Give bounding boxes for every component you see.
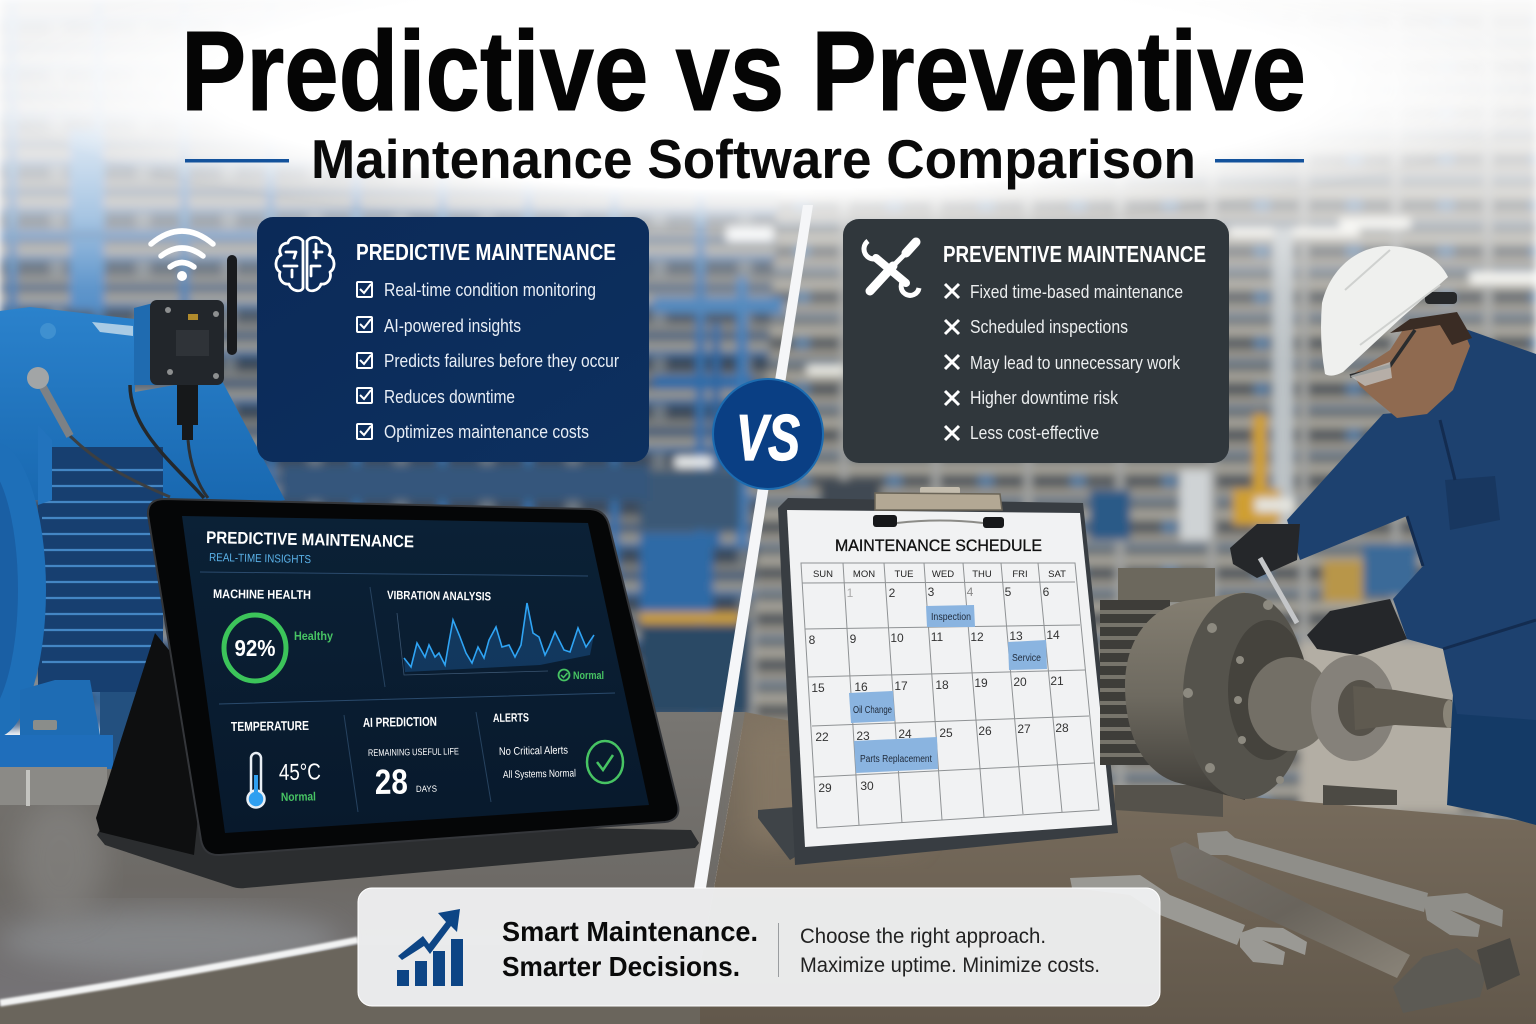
tablet dashboard: REAL-TIME INSIGHTS bbox=[209, 552, 311, 566]
calendar: maintenance schedule: Parts Replacement bbox=[860, 754, 932, 765]
calendar: maintenance schedule: 25 bbox=[939, 726, 953, 740]
calendar: maintenance schedule: 14 bbox=[1046, 628, 1060, 642]
VS badge bbox=[713, 379, 823, 489]
sensor device with antenna and cables bbox=[27, 255, 237, 498]
calendar: maintenance schedule: 30 bbox=[860, 779, 874, 793]
icon: wifi signal bbox=[151, 231, 213, 280]
calendar: maintenance schedule: 27 bbox=[1017, 722, 1031, 736]
calendar: maintenance schedule: 6 bbox=[1043, 585, 1050, 599]
clipboard board bbox=[778, 498, 1118, 865]
calendar: maintenance schedule: 4 bbox=[967, 585, 974, 599]
tablet dashboard: Normal bbox=[573, 670, 604, 682]
callout bar: Smart Maintenance. bbox=[502, 916, 758, 947]
calendar: maintenance schedule: 20 bbox=[1013, 675, 1027, 689]
gloves bbox=[1230, 524, 1300, 578]
vibration chart bbox=[397, 603, 594, 675]
gauge 92% bbox=[224, 615, 286, 681]
panel: predictive maintenance bbox=[257, 217, 649, 462]
tablet dashboard: DAYS bbox=[416, 784, 437, 794]
tablet dashboard: TEMPERATURE bbox=[231, 718, 309, 734]
screen bbox=[182, 516, 649, 833]
calendar: maintenance schedule: 2 bbox=[889, 586, 896, 600]
tablet dashboard: AI PREDICTION bbox=[363, 714, 437, 730]
calendar: maintenance schedule: 23 bbox=[856, 729, 870, 743]
tablet dashboard: 28 bbox=[374, 762, 408, 802]
tablet dashboard: VIBRATION ANALYSIS bbox=[387, 588, 491, 603]
callout bar: Maximize uptime. Minimize costs. bbox=[800, 954, 1100, 977]
small wrench bbox=[1070, 875, 1307, 965]
tablet dashboard: REMAINING USEFUL LIFE bbox=[368, 746, 459, 759]
calendar: maintenance schedule: Oil Change bbox=[853, 705, 892, 716]
checklist bbox=[357, 279, 619, 442]
panel: preventive maintenance bbox=[843, 219, 1229, 463]
gauge 92%: 92% bbox=[234, 635, 276, 661]
calendar: maintenance schedule: 18 bbox=[935, 678, 949, 692]
calendar: maintenance schedule: 29 bbox=[818, 781, 832, 795]
calendar: maintenance schedule: MON bbox=[853, 569, 875, 580]
checklist: Predicts failures before they occur bbox=[384, 350, 619, 371]
calendar: maintenance schedule: 26 bbox=[978, 724, 992, 738]
wrenches and hammer bbox=[1070, 831, 1520, 1013]
calendar: maintenance schedule: Service bbox=[1012, 653, 1041, 664]
paper bbox=[787, 510, 1112, 847]
goggles bbox=[1350, 330, 1415, 386]
calendar: maintenance schedule: 5 bbox=[1005, 585, 1012, 599]
clip bbox=[873, 487, 1004, 528]
calendar: maintenance schedule: 12 bbox=[970, 630, 984, 644]
checklist: AI-powered insights bbox=[384, 315, 521, 336]
tablet dashboard: No Critical Alerts bbox=[499, 745, 568, 758]
blue event tags bbox=[849, 605, 1047, 773]
calendar: maintenance schedule: 10 bbox=[890, 631, 904, 645]
icon: growth chart bbox=[397, 909, 463, 986]
calendar: maintenance schedule: 16 bbox=[854, 680, 868, 694]
calendar stand bbox=[758, 807, 795, 860]
pants bbox=[1447, 680, 1536, 825]
calendar: maintenance schedule: 24 bbox=[898, 727, 912, 741]
x list: May lead to unnecessary work bbox=[970, 352, 1181, 373]
calendar: maintenance schedule: 11 bbox=[931, 630, 944, 644]
calendar: maintenance schedule: 22 bbox=[815, 730, 829, 744]
calendar: maintenance schedule: Inspection bbox=[931, 612, 971, 623]
tablet body bbox=[148, 499, 678, 855]
table tops bbox=[0, 712, 745, 1024]
calendar: maintenance schedule: 19 bbox=[974, 676, 988, 690]
callout bar bbox=[358, 888, 1160, 1006]
calendar: maintenance schedule: 3 bbox=[928, 585, 935, 599]
folio stand bbox=[96, 633, 210, 855]
calendar: maintenance schedule: SAT bbox=[1048, 569, 1066, 580]
dashboard heading: PREDICTIVE MAINTENANCE bbox=[206, 528, 414, 551]
face bbox=[1353, 315, 1470, 418]
x list bbox=[945, 281, 1183, 443]
calendar: maintenance schedule: 28 bbox=[1055, 721, 1069, 735]
right factory structure bbox=[807, 365, 845, 375]
calendar: maintenance schedule: 1 bbox=[847, 586, 854, 600]
x list: Less cost-effective bbox=[970, 422, 1099, 443]
icon: thermometer bbox=[248, 753, 264, 808]
tablet dashboard: ALERTS bbox=[493, 710, 529, 725]
icon: brain bbox=[276, 237, 334, 291]
tablet dashboard bbox=[96, 499, 699, 888]
tablet dashboard: 45°C bbox=[279, 758, 321, 785]
callout bar: Smarter Decisions. bbox=[502, 951, 740, 982]
shirt and sleeves bbox=[1287, 327, 1536, 720]
tablet dashboard: Normal bbox=[281, 789, 316, 804]
title: Predictive vs Preventive bbox=[181, 8, 1306, 134]
left factory structure bbox=[70, 130, 104, 310]
calendar: maintenance schedule: THU bbox=[972, 569, 992, 580]
tablet dashboard: All Systems Normal bbox=[503, 767, 576, 781]
subtitle: Maintenance Software Comparison bbox=[311, 128, 1196, 190]
calendar: maintenance schedule bbox=[758, 487, 1118, 865]
icon: crossed tools bbox=[864, 241, 919, 295]
worker with hard hat bbox=[1230, 246, 1536, 825]
icon: alert check bbox=[587, 741, 623, 783]
x list: Fixed time-based maintenance bbox=[970, 281, 1183, 302]
machine: old motor bbox=[1100, 568, 1455, 817]
calendar: maintenance schedule: SUN bbox=[813, 569, 833, 580]
tablet dashboard: Healthy bbox=[294, 629, 333, 643]
tablet dashboard: MACHINE HEALTH bbox=[213, 587, 311, 602]
calendar: maintenance schedule: TUE bbox=[894, 569, 914, 580]
flange bolts bbox=[1183, 600, 1284, 784]
callout bar: Choose the right approach. bbox=[800, 925, 1046, 948]
heading: PREDICTIVE MAINTENANCE bbox=[356, 239, 616, 265]
x list: Scheduled inspections bbox=[970, 316, 1128, 337]
diagonal divider bbox=[694, 205, 813, 888]
hard hat bbox=[1321, 246, 1457, 376]
hammer bbox=[1170, 842, 1520, 1013]
calendar: maintenance schedule: 9 bbox=[850, 632, 857, 646]
x list: Higher downtime risk bbox=[970, 387, 1119, 408]
top white fade bbox=[0, 0, 1536, 360]
folio case base bbox=[97, 820, 699, 888]
socket wrench bbox=[1260, 558, 1297, 623]
calendar: maintenance schedule: MAINTENANCE SCHEDULE bbox=[835, 536, 1042, 555]
VS badge: VS bbox=[736, 401, 800, 474]
motor: blue electric motor bbox=[0, 307, 285, 806]
heading: PREVENTIVE MAINTENANCE bbox=[943, 241, 1206, 267]
calendar: maintenance schedule: WED bbox=[932, 569, 954, 580]
calendar: maintenance schedule: 8 bbox=[809, 633, 816, 647]
calendar: maintenance schedule: 17 bbox=[894, 679, 908, 693]
checklist: Reduces downtime bbox=[384, 386, 515, 407]
calendar: maintenance schedule: 13 bbox=[1009, 629, 1023, 643]
checklist: Optimizes maintenance costs bbox=[384, 421, 589, 442]
cooling fins bbox=[38, 447, 163, 692]
calendar grid bbox=[801, 563, 1099, 828]
hair bbox=[1390, 312, 1472, 345]
calendar: maintenance schedule: 15 bbox=[811, 681, 825, 695]
checklist: Real-time condition monitoring bbox=[384, 279, 596, 300]
calendar: maintenance schedule: 21 bbox=[1050, 674, 1064, 688]
long wrench bbox=[1197, 831, 1503, 937]
calendar: maintenance schedule: FRI bbox=[1012, 569, 1028, 580]
